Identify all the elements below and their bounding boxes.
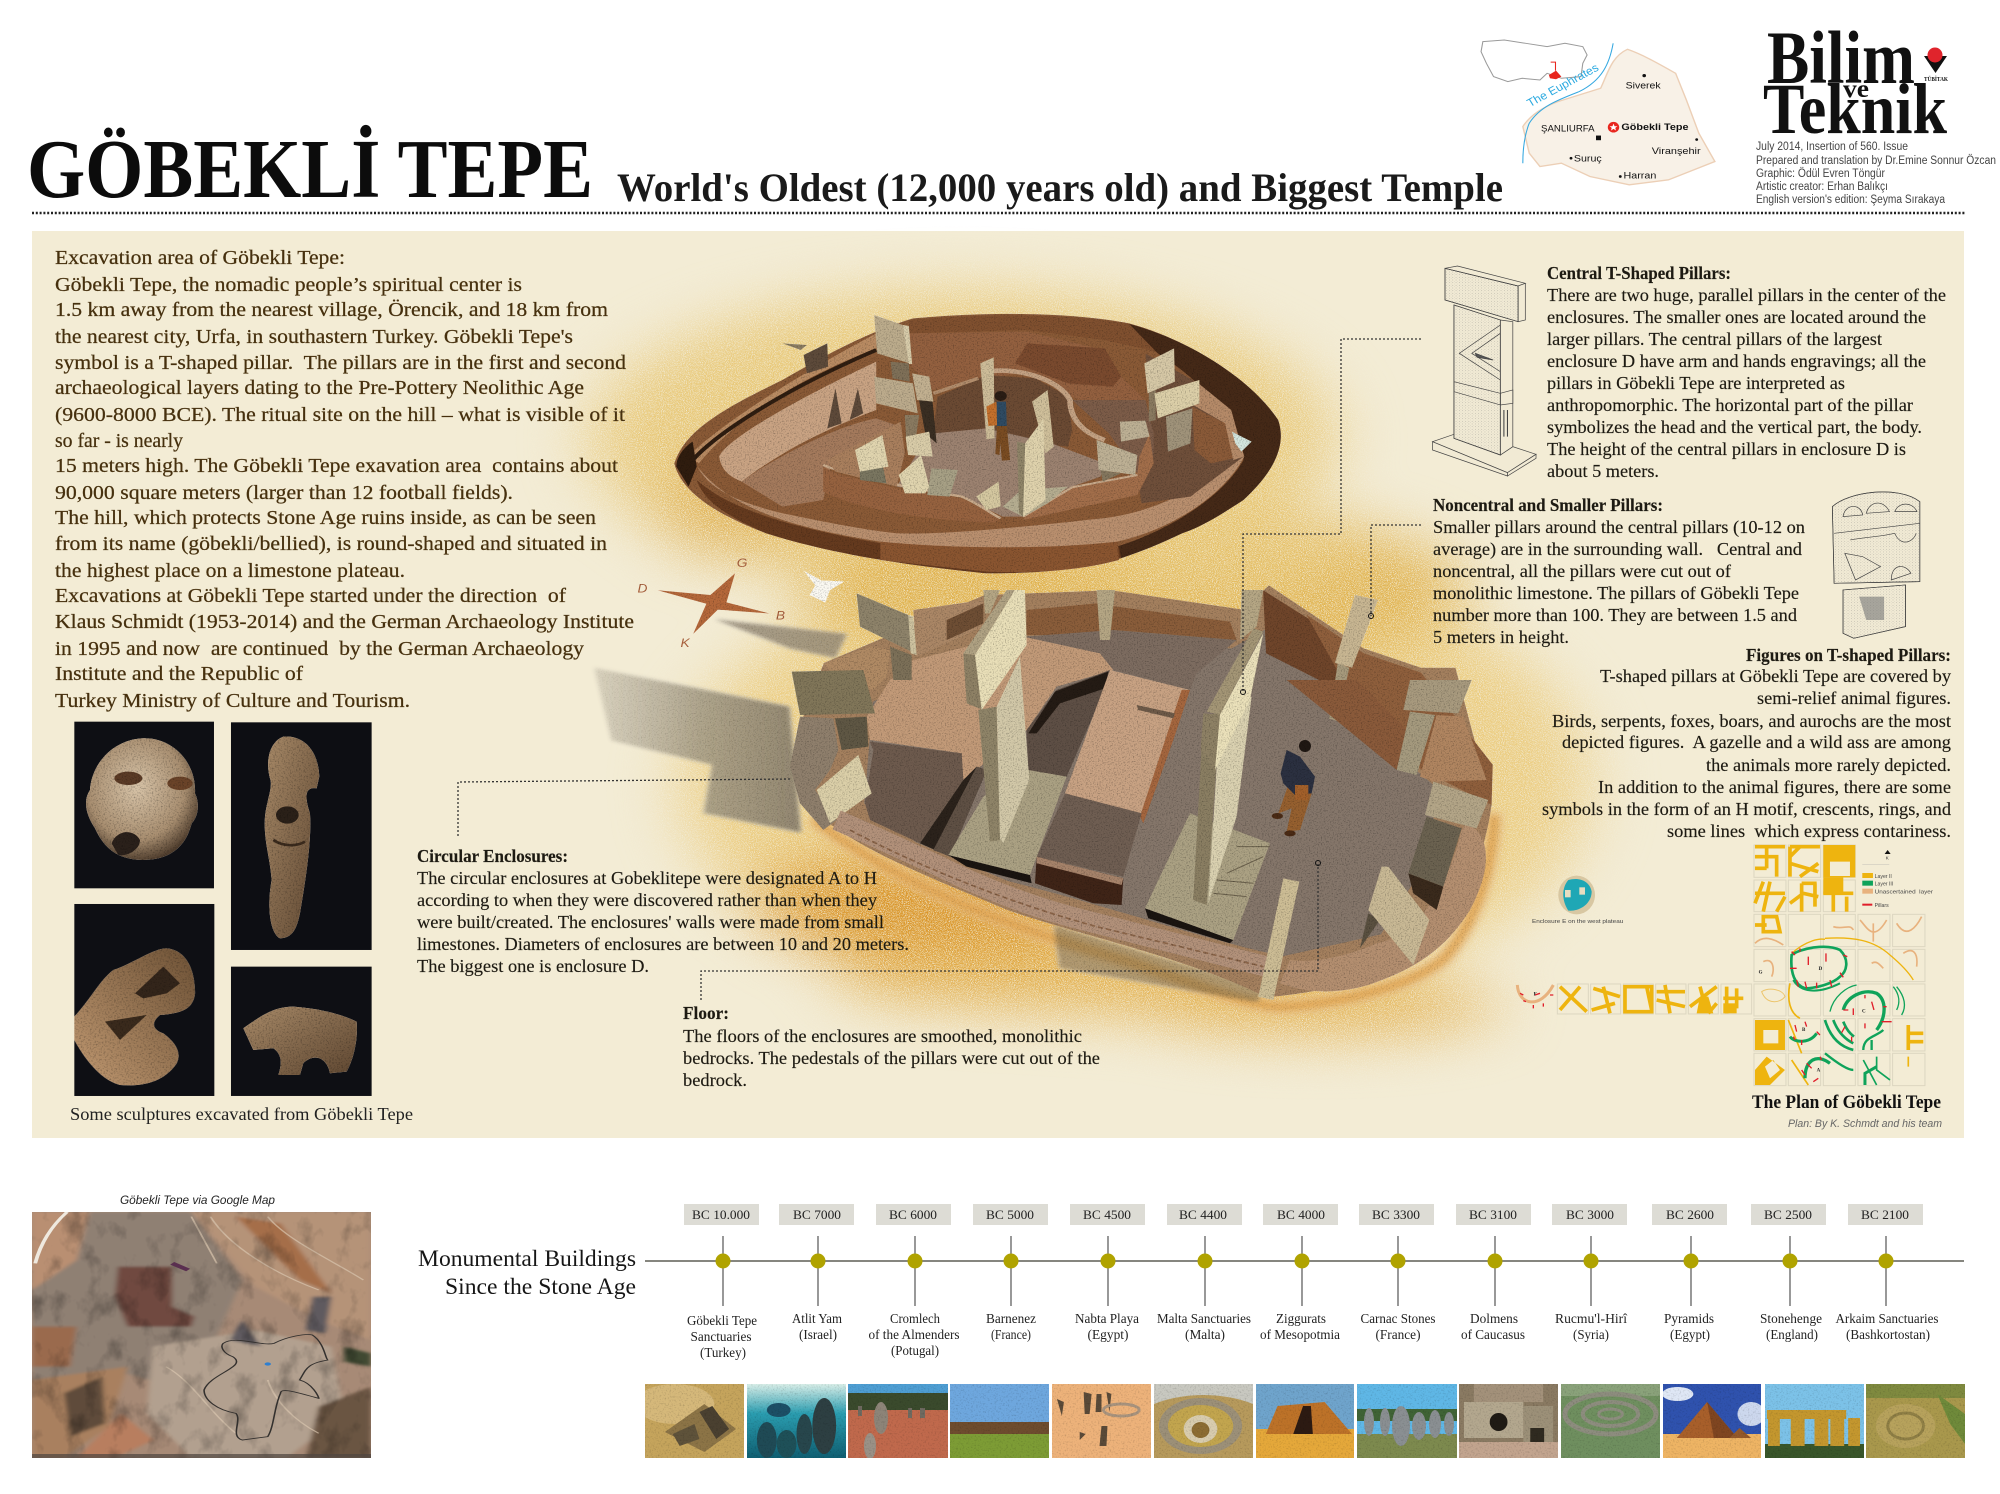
Layer II walls [1560,847,1923,1085]
text block: figures on pillars: T-shaped pillars at Göbekli Tepe are covered by [1600,666,1951,686]
back pillars [1097,590,1115,640]
text block: excavation area: Excavation area of Göbekli Tepe: [55,247,345,269]
photo: Göbekli Tepe [645,1384,744,1458]
date labels: BC 3000 [1566,1207,1614,1222]
place names: Göbekli Tepe [1621,123,1689,133]
text block: floor: bedrock. [683,1070,747,1090]
date labels: BC 10.000 [692,1207,750,1222]
plan credit: Plan: By K. Schmdt and his team [1788,1118,1942,1130]
enclosure letters: G [1759,970,1763,975]
text block: excavation area: 15 meters high. The Göbekli Tepe exavation area contains about [55,455,618,477]
text block: figures on pillars: In addition to the animal figures, there are some [1598,777,1951,797]
photo: Carnac stones [1357,1384,1457,1458]
Turkey outline [1481,40,1587,82]
front rock rim [837,820,1280,970]
site labels: Göbekli Tepe [687,1313,757,1328]
connectors [723,1236,1886,1306]
text block: central pillars: anthropomorphic. The horizontal part of the pillar [1547,395,1913,415]
site labels: (Turkey) [700,1345,746,1360]
credits: English version's edition: Şeyma Sırakaya [1756,194,1946,206]
enclosure E [1532,876,1623,925]
credits: Artistic creator: Erhan Balıkçı [1756,181,1888,193]
photo: Atlit Yam [747,1384,846,1458]
date labels [692,1207,1909,1222]
compass and cast shadows [594,556,1494,1007]
credits [1756,141,1996,206]
magazine logo: Bilim ve Teknik [1763,17,1948,149]
text block: noncentral pillars [1433,495,1805,647]
river label: The Euphrates [1525,61,1601,110]
site labels: (England) [1766,1327,1818,1342]
text block: excavation area: Excavations at Göbekli Tepe started under the direction of [55,585,566,607]
text block: figures on pillars: symbols in the form of an H motif, crescents, rings, and [1542,799,1951,819]
photo: boar figure [231,967,372,1096]
place names: Siverek [1626,81,1661,91]
photo: Stonehenge [1765,1384,1864,1458]
icon: TÜBİTAK emblem [1924,48,1948,83]
icon: white dove [804,571,844,602]
icon: compass star [637,556,786,650]
site labels: Malta Sanctuaries [1157,1311,1251,1326]
panel: main cream panel [32,231,1964,1138]
outer top band [909,315,1203,367]
icon: TÜBİTAK emblem: TÜBİTAK [1924,76,1948,83]
text block: noncentral pillars: Smaller pillars around the central pillars (10-12 on [1433,517,1805,538]
site labels: (Malta) [1185,1327,1225,1342]
text block: circular enclosures: according to when they were discovered rather than when they [417,890,877,910]
province shape [1523,49,1715,185]
credits: July 2014, Insertion of 560. Issue [1756,141,1908,153]
text block: excavation area: Klaus Schmidt (1953-2014) and the German Archaeology Institute [55,611,634,633]
text block: figures on pillars: Birds, serpents, foxes, boars, and aurochs are the most [1552,711,1951,731]
text block: central pillars: There are two huge, parallel pillars in the center of the [1547,285,1946,305]
text block: central pillars: The height of the central pillars in enclosure D is [1547,439,1906,459]
text block: central pillars: enclosure D have arm and hands engravings; all the [1547,351,1926,371]
photo: Cromlech of the Almenders [848,1384,948,1458]
heading: monumental buildings: Monumental Buildings [418,1246,636,1271]
lower enclosure shell [792,585,1493,997]
right pedestal [1145,908,1233,943]
enclosure E: Enclosure E on the west plateau [1532,919,1623,925]
text block: floor: Floor: [683,1003,729,1023]
outer rim left [689,333,876,463]
text block: noncentral pillars: number more than 100. They are between 1.5 and [1433,605,1797,625]
photo: Rujm el-Hiri [1561,1384,1660,1458]
text block: central pillars: larger pillars. The central pillars of the largest [1547,329,1882,349]
credits: Graphic: Ödül Evren Töngür [1756,168,1885,180]
icon: compass star: G [737,556,748,570]
place names: ŞANLIURFA [1541,124,1595,134]
text block: noncentral pillars: average) are in the surrounding wall. Central and [1433,539,1802,560]
site labels: Ziggurats [1276,1311,1326,1326]
site labels: (France) [991,1327,1031,1342]
site labels: Pyramids [1664,1311,1714,1326]
text block: circular enclosures: limestones. Diameters of enclosures are between 10 and 20 meters. [417,934,909,954]
text block: excavation area: so far - is nearly [55,430,184,452]
magazine logo: Bilim ve Teknik: Bilim [1767,17,1915,100]
photo: stone head [74,722,214,888]
figure: visitor in lower enclosure [1272,740,1315,836]
plan legend: Pillars [1875,903,1889,909]
location map [1481,40,1715,185]
date labels: BC 6000 [889,1207,937,1222]
icon: small bird [1232,432,1252,452]
date labels: BC 5000 [986,1207,1034,1222]
text block: figures on pillars: semi-relief animal figures. [1757,688,1951,708]
pillar drawing: noncentral [1832,492,1920,638]
text block: excavation area: (9600-8000 BCE). The ritual site on the hill – what is visible of it [55,404,625,426]
enclosure letters: C [1862,1010,1866,1015]
site labels: Carnac Stones [1360,1311,1436,1326]
site labels: (Syria) [1573,1327,1609,1342]
bottom outer wall [697,480,1121,573]
photos: sculptures [74,722,372,1096]
text block: central pillars [1547,263,1946,481]
rim top [698,457,1244,547]
photo: Arkaim [1866,1384,1965,1458]
text block: figures on pillars: Figures on T-shaped Pillars: [1746,645,1951,665]
enclosure letters [1534,967,1866,1074]
central pillar left [963,590,1029,843]
site labels: of Mesopotmia [1260,1327,1340,1342]
text block: excavation area: in 1995 and now are continued by the German Archaeology [55,638,585,660]
enclosure letters: F [1534,992,1537,997]
site labels: of the Almenders [868,1327,960,1342]
photo: Dolmens of Caucasus [1459,1384,1558,1458]
plan legend: Layer II [1875,874,1892,880]
photo: standing figure [231,722,372,950]
site labels: (Egypt) [1088,1327,1128,1342]
site labels: (Potugal) [891,1343,939,1358]
back right pillar [1329,595,1378,721]
left pedestal [948,855,1032,883]
subtitle: World's Oldest (12,000 years old) and Biggest Temple [617,165,1503,210]
heading: monumental buildings [418,1246,636,1299]
text block: floor: The floors of the enclosures are smoothed, monolithic [683,1026,1082,1046]
orange fringe [813,813,1494,1007]
lower enclosure [790,585,1493,1000]
date labels: BC 4000 [1277,1207,1325,1222]
central pillar right [1193,628,1263,905]
photo: Ziggurats of Mesopotamia [1256,1384,1354,1458]
date labels: BC 7000 [793,1207,841,1222]
text block: noncentral pillars: Noncentral and Smaller Pillars: [1433,495,1663,515]
enclosure letters: B [1802,1028,1806,1033]
text block: circular enclosures: were built/created. The enclosures' walls were made from small [417,912,884,932]
title: GÖBEKLİ TEPE [27,123,593,216]
text block: circular enclosures: Circular Enclosures: [417,846,568,866]
illustration: Göbekli Tepe enclosures [594,314,1494,1007]
photo: Barnenez [950,1384,1049,1458]
text block: floor: bedrocks. The pedestals of the pillars were cut out of the [683,1048,1100,1068]
date boxes [684,1204,1923,1225]
Layer III walls [1790,947,1904,1085]
plan grid cells [1557,845,1925,1086]
text block: central pillars: symbolizes the head and the vertical part, the body. [1547,417,1922,437]
date labels: BC 3300 [1372,1207,1420,1222]
text block: excavation area: 1.5 km away from the nearest village, Örencik, and 18 km from [55,298,608,321]
date labels: BC 2500 [1764,1207,1812,1222]
date labels: BC 4400 [1179,1207,1227,1222]
text block: floor [683,1003,1100,1090]
icon: compass star: K [681,636,690,650]
upper enclosure [674,314,1281,573]
text block: excavation area: Institute and the Republic of [55,663,303,685]
right trench [1117,324,1281,558]
right wall and floor [1137,353,1243,503]
upper pillars [782,315,1199,517]
site labels: Atlit Yam [792,1311,842,1326]
heading: plan title: The Plan of Göbekli Tepe [1752,1092,1941,1113]
enclosure letters: A [1817,1069,1821,1074]
caption: sculptures: Some sculptures excavated from Göbekli Tepe [70,1104,413,1124]
inner wall left [719,362,876,482]
site labels: (Israel) [799,1327,837,1342]
photo: satellite map [32,1212,371,1458]
enclosure letters: D [1819,967,1823,972]
heading: monumental buildings: Since the Stone Age [445,1274,636,1299]
right side wall, pillars and visitor [1258,680,1488,1000]
Euphrates river [1523,43,1613,163]
inner ring wall [823,467,1001,523]
photo: Malta sanctuaries [1154,1384,1253,1458]
nodes [716,1254,1894,1268]
leader lines [458,339,1421,1000]
figure: visitor in upper enclosure [986,391,1010,461]
place names [1541,74,1701,181]
back wall [909,332,1150,423]
icon: compass star: B [776,608,786,622]
text block: circular enclosures: The biggest one is enclosure D. [417,956,649,976]
place names: Suruç [1574,154,1602,164]
text block: excavation area: The hill, which protects Stone Age ruins inside, as can be seen [55,507,596,529]
text block: circular enclosures: The circular enclosures at Gobeklitepe were designated A to H [417,868,877,888]
chart: plan of Göbekli Tepe [1517,845,1933,1086]
text block: excavation area: 90,000 square meters (larger than 12 football fields). [55,482,513,504]
Urfa highlight [1549,62,1561,79]
photo: Nabta Playa [1052,1384,1151,1458]
text block: central pillars: pillars in Göbekli Tepe are interpreted as [1547,373,1845,393]
cast shadow [594,668,801,833]
text block: excavation area: symbol is a T-shaped pillar. The pillars are in the first and second [55,352,626,374]
text block: noncentral pillars: monolithic limestone. The pillars of Göbekli Tepe [1433,583,1799,603]
site labels: Stonehenge [1760,1311,1822,1326]
site labels: Arkaim Sanctuaries [1836,1311,1938,1326]
text block: figures on pillars: some lines which express contariness. [1667,821,1951,841]
site labels: Cromlech [890,1311,940,1326]
text block: figures on pillars: the animals more rarely depicted. [1706,755,1951,775]
left perimeter pillars [792,593,917,823]
site labels: of Caucasus [1461,1327,1525,1342]
pillar drawing: central [1432,266,1536,476]
text block: central pillars: enclosures. The smaller ones are located around the [1547,307,1926,327]
place names: Harran [1623,171,1656,181]
unascertained layer walls [1517,917,1922,1002]
text block: excavation area: the highest place on a limestone plateau. [55,560,405,582]
site labels [687,1311,1938,1360]
site labels: Nabta Playa [1075,1311,1139,1326]
site labels: (Egypt) [1670,1327,1710,1342]
photo: Pyramids [1663,1384,1761,1458]
magazine logo: Bilim ve Teknik: Teknik [1763,69,1947,149]
text block: circular enclosures [417,846,909,976]
timeline [645,1204,1964,1360]
text block: excavation area: the nearest city, Urfa, in southastern Turkey. Göbekli Tepe's [55,326,573,348]
text block: figures on pillars [1542,645,1951,841]
photo: animal figure [74,904,214,1096]
plan legend: Unascertained layer [1875,889,1933,895]
drawings: T-shaped pillars [1432,266,1920,638]
left floor [742,418,901,507]
text block: excavation area: Turkey Ministry of Culture and Tourism. [55,690,410,712]
photo strip: monuments [635,1384,1965,1459]
plan legend [1862,850,1933,909]
text block: central pillars: Central T-Shaped Pillars: [1547,263,1731,283]
axis [645,1260,1964,1262]
icon: compass star: D [637,582,647,595]
text block: excavation area: archaeological layers dating to the Pre-Pottery Neolithic Age [55,377,584,399]
site labels: Rucmu'l-Hirî [1555,1311,1628,1326]
site labels: (France) [1376,1327,1420,1342]
pillar marks [1520,948,1892,1082]
text block: excavation area: Göbekli Tepe, the nomadic people’s spiritual center is [55,274,522,296]
caption: google map: Göbekli Tepe via Google Map [120,1195,276,1207]
illustration: sandy glow [589,290,1587,1036]
date labels: BC 3100 [1469,1207,1517,1222]
inner centre [933,375,1072,447]
site labels: (Bashkortostan) [1846,1327,1930,1342]
site labels: Dolmens [1470,1311,1518,1326]
date labels: BC 4500 [1083,1207,1131,1222]
text block: central pillars: about 5 meters. [1547,461,1659,481]
site labels: Barnenez [986,1311,1036,1326]
place names: Viranşehir [1652,146,1701,157]
text block: figures on pillars: depicted figures. A gazelle and a wild ass are among [1562,732,1951,752]
text block: noncentral pillars: noncentral, all the pillars were cut out of [1433,561,1731,581]
text block: excavation area: from its name (göbekli/bellied), is round-shaped and situated in [55,533,607,555]
plan legend: K [1886,855,1890,860]
magazine logo: Bilim ve Teknik: ve [1843,76,1869,103]
text block: noncentral pillars: 5 meters in height. [1433,627,1569,647]
text block: excavation area [55,247,634,712]
date labels: BC 2600 [1666,1207,1714,1222]
site labels: Sanctuaries [690,1329,752,1344]
central floor, bench and pillars [790,590,1280,970]
plan legend: Layer III [1875,882,1893,888]
date labels: BC 2100 [1861,1207,1909,1222]
